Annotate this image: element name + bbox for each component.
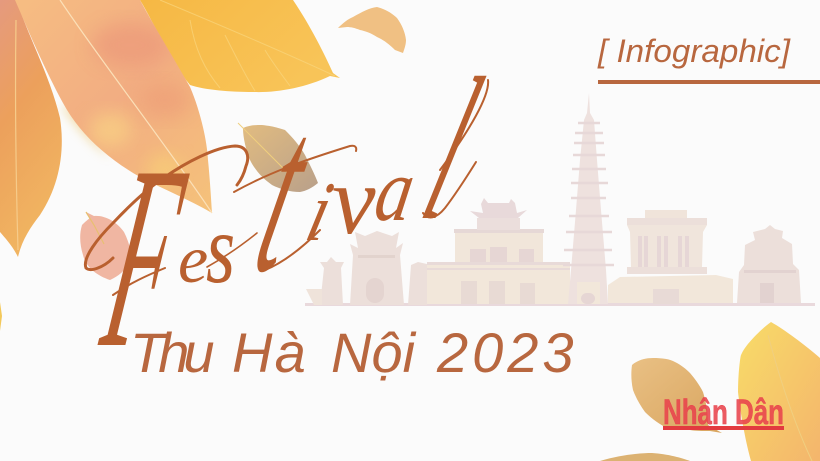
- skyline of Hanoi landmarks: [305, 93, 815, 306]
- title: Festival: i: [298, 165, 342, 259]
- small side gate: [408, 262, 427, 305]
- leaf: pink: [80, 212, 131, 280]
- leaf: yellow bottom right: [738, 322, 820, 461]
- title: Festival: l: [403, 36, 502, 263]
- leaf shadow: [60, 105, 110, 158]
- title: Festival: e: [178, 221, 208, 297]
- label underline: [598, 80, 820, 84]
- title: Festival: s: [206, 194, 235, 305]
- leaf: yellow: [140, 0, 340, 92]
- citadel wall: [427, 262, 570, 304]
- temple right: [737, 225, 801, 303]
- subtitle: Thu Hà Nội 2023: Thu: [130, 321, 218, 384]
- citadel pavilion: [470, 198, 527, 230]
- title: Festival: t: [236, 60, 336, 321]
- subtitle: Thu Hà Nội 2023: Hà: [232, 321, 325, 384]
- leaf: tan bottom right: [631, 358, 722, 433]
- leaf: brown: [238, 123, 318, 192]
- citadel upper level: [454, 229, 544, 262]
- leaf: orange left: [0, 0, 62, 257]
- subtitle: Thu Hà Nội 2023: 2023: [436, 321, 578, 384]
- subtitle: Thu Hà Nội 2023: Nội: [331, 321, 431, 384]
- leaves: top left cluster: [0, 0, 340, 257]
- title: Festival: a: [369, 140, 422, 240]
- title: Festival: [87, 36, 502, 402]
- flag tower: [563, 93, 614, 304]
- leaf: left edge sliver: [0, 302, 2, 331]
- leaf: large peach: [15, 0, 212, 213]
- title: Festival: v: [332, 147, 376, 255]
- label: Infographic: [ Infographic]: [597, 33, 791, 69]
- leaf: small curled: [338, 7, 406, 53]
- small gate left: [306, 257, 344, 305]
- mausoleum: [608, 210, 733, 304]
- leaf: bottom edge: [600, 453, 690, 461]
- ground line: [305, 303, 815, 306]
- title: Festival: F: [87, 113, 201, 402]
- gate tower: [350, 231, 404, 305]
- calligraphic flourishes of title: [85, 80, 488, 295]
